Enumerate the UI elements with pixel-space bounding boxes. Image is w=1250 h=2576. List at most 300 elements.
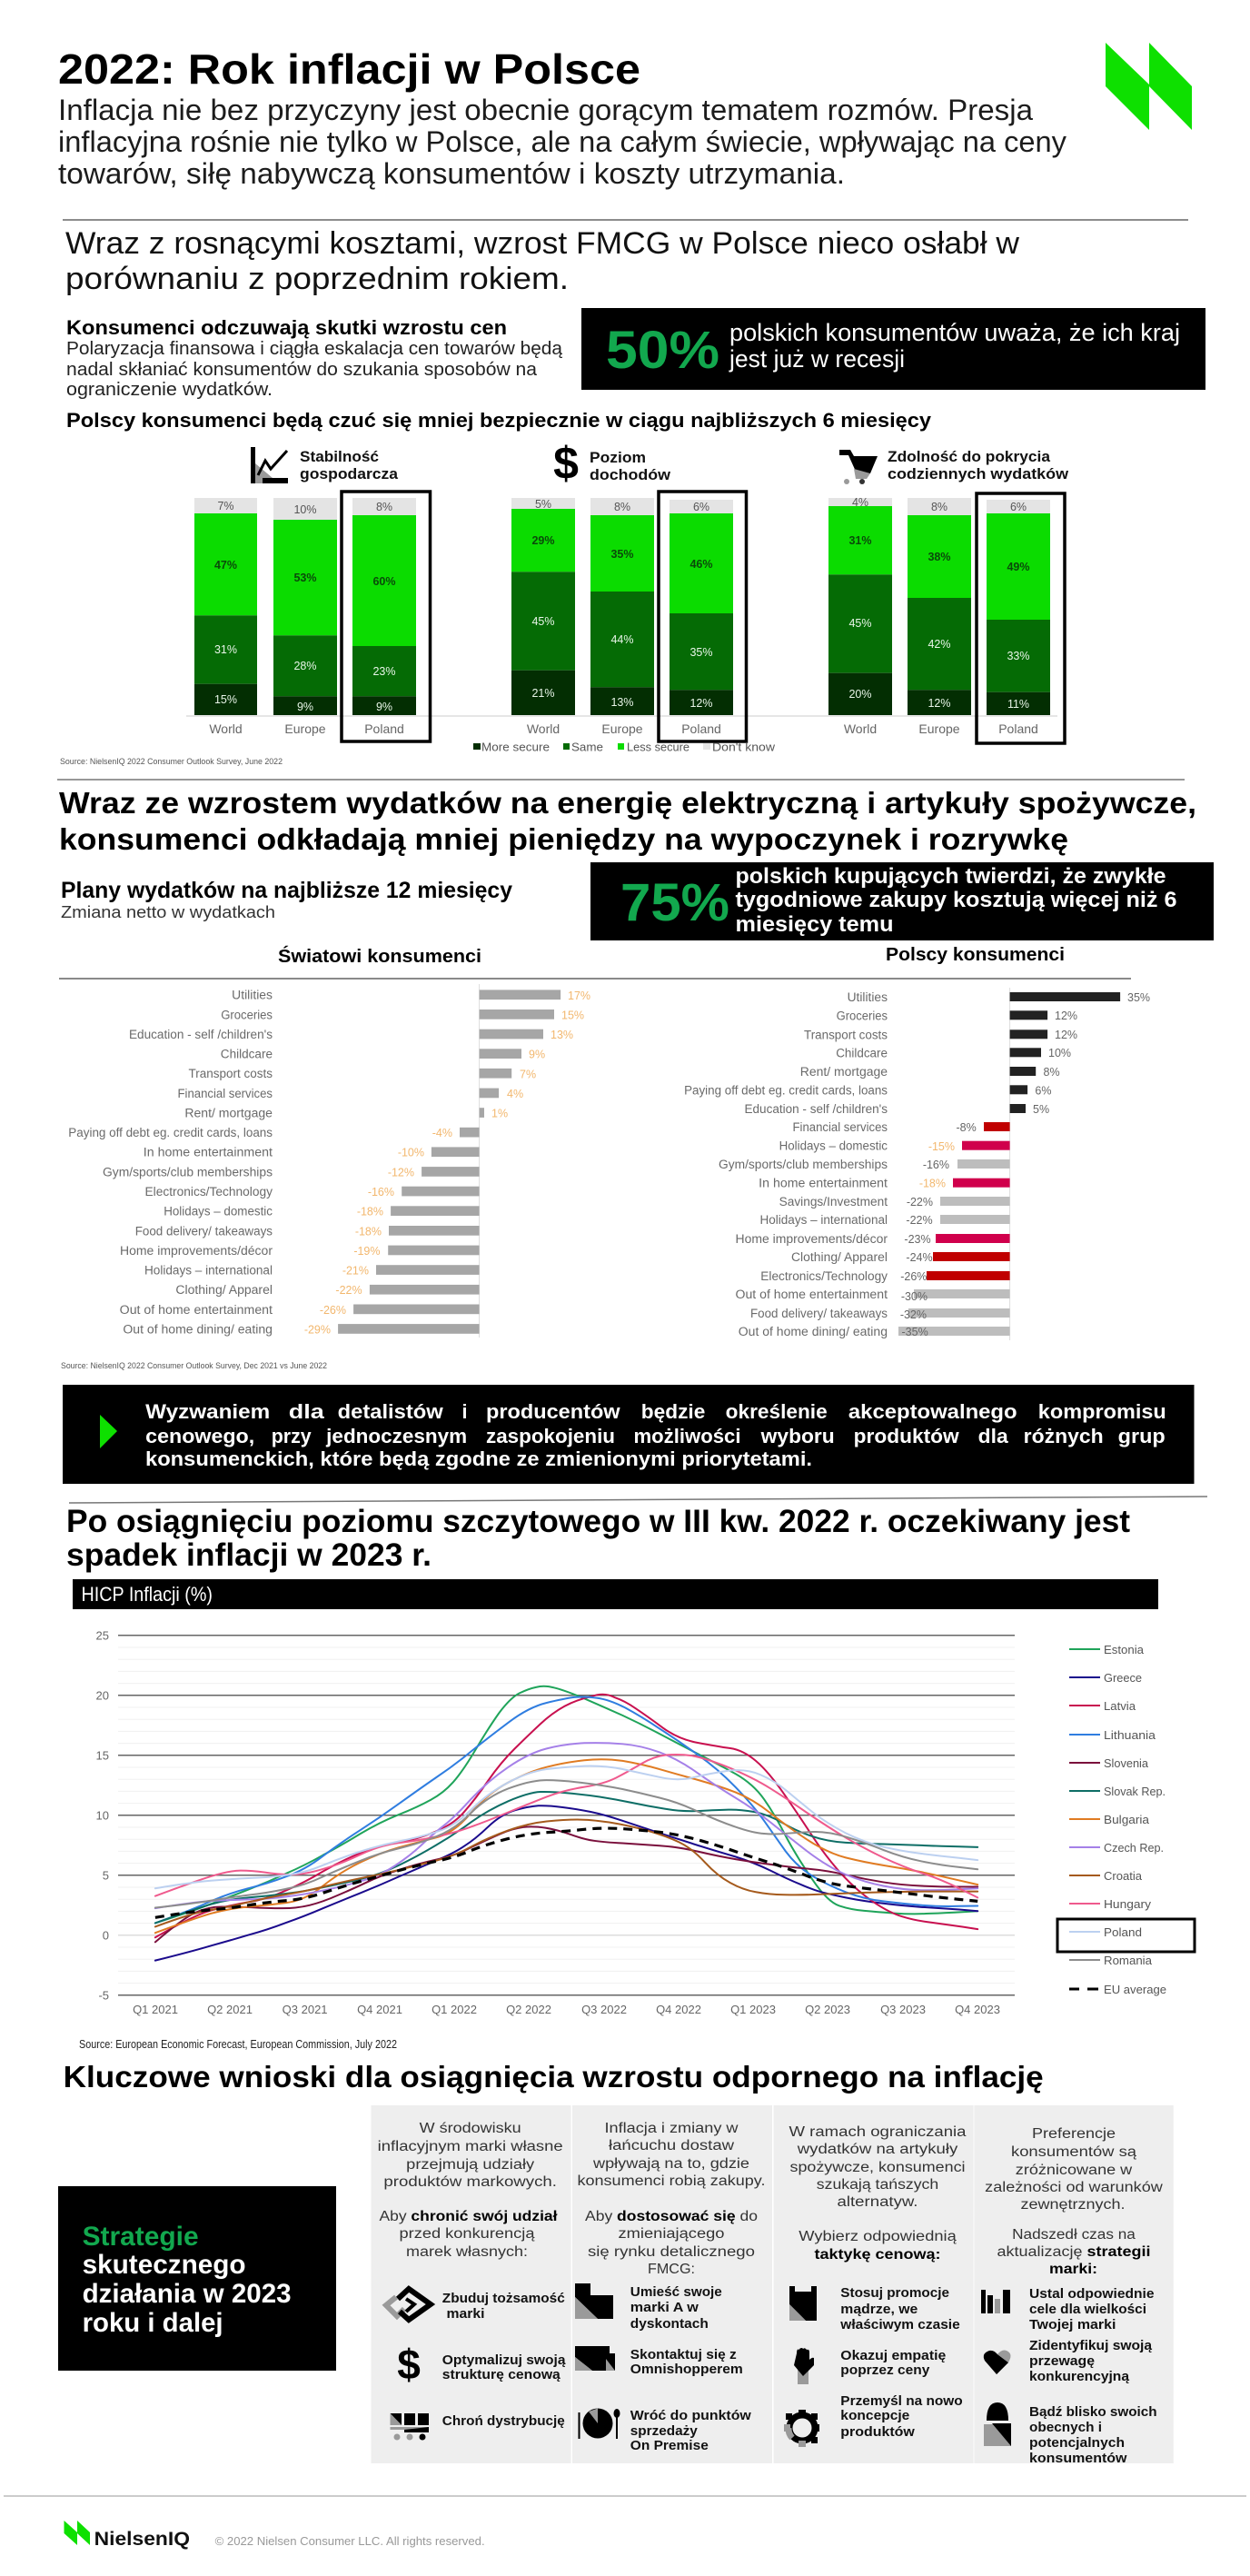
category labels: Out of home dining/ eating <box>739 1325 888 1338</box>
x axis labels: Q3 2023 <box>880 2003 926 2016</box>
callout: challenge for retailers <box>63 1385 1194 1484</box>
callout: challenge for retailers: Wyzwaniem <box>145 1400 270 1423</box>
bar: poland: 23% <box>372 665 396 678</box>
panel: strategies box <box>58 2186 336 2371</box>
poland highlight boxes <box>342 492 1065 743</box>
bar: world <box>828 496 892 715</box>
text: promotions <box>839 2286 960 2332</box>
chart heading: Polscy konsumenci będą czuć się mniej bezpiecznie w ciągu najbliższych 6 miesięcy <box>66 409 932 432</box>
value labels: 10% <box>1048 1047 1071 1059</box>
chart legend: Bulgaria <box>1104 1813 1150 1826</box>
value labels <box>304 990 590 1336</box>
text: build brand identity: Zbuduj tożsamość <box>442 2292 565 2306</box>
bar: poland: 46% <box>689 558 713 571</box>
panel text: alternatyw. <box>838 2194 918 2210</box>
bars <box>338 990 561 1334</box>
label: covering daily expenses: codziennych wydatków <box>888 466 1068 482</box>
chart legend: Estonia <box>1104 1643 1145 1656</box>
line: Hungary <box>155 1755 977 1897</box>
text: stay close to consumers: potencjalnych <box>1029 2436 1125 2451</box>
panel: private label <box>371 2105 570 2463</box>
category labels: Holidays – domestic <box>164 1205 273 1218</box>
text: empathy: Okazuj empatię <box>840 2349 946 2363</box>
bar: world <box>194 498 257 715</box>
panel text: Aby chronić swój udział <box>380 2209 558 2224</box>
text: build brand identity: marki <box>447 2307 485 2322</box>
y axis labels: 25 <box>96 1628 109 1643</box>
category labels: Poland <box>364 721 404 736</box>
chart legend: Latvia <box>1104 1699 1136 1713</box>
bar: europe: 44% <box>610 633 634 646</box>
value labels: -10% <box>398 1147 424 1159</box>
category labels: World <box>209 721 243 736</box>
label: covering daily expenses: Zdolność do pokrycia <box>888 449 1051 465</box>
callout: challenge for retailers: produktów <box>854 1425 960 1447</box>
line: Greece <box>155 1805 977 1961</box>
text: on premise: Wróć do punktów <box>630 2409 752 2423</box>
bar: world: 15% <box>214 693 237 706</box>
callout: challenge for retailers: możliwości <box>634 1425 741 1447</box>
icon: brand identity <box>386 2289 431 2320</box>
chart legend: Hungary <box>1104 1897 1152 1911</box>
bar: europe: 10% <box>293 503 317 516</box>
bar: world <box>511 498 575 715</box>
text: omnishopper <box>630 2348 743 2377</box>
panel text <box>378 2121 563 2260</box>
value labels: -22% <box>906 1214 933 1227</box>
callout: challenge for retailers: określenie <box>726 1400 828 1423</box>
panel text: łańcuchu dostaw <box>609 2138 735 2153</box>
callout: 50%: polskich konsumentów uważa, że ich kraj <box>729 319 1180 346</box>
category labels: Gym/sports/club memberships <box>719 1158 888 1171</box>
panel text: W środowisku <box>420 2121 521 2136</box>
value labels: 12% <box>1055 1010 1077 1022</box>
text: rethink products <box>840 2394 963 2440</box>
icon: dollar: $ <box>397 2341 421 2388</box>
value labels: -8% <box>956 1121 977 1134</box>
chart legend: Slovenia <box>1104 1756 1149 1770</box>
bar: world: 47% <box>214 559 237 572</box>
y axis labels: 0 <box>103 1928 109 1943</box>
panel text: zależności od warunków <box>985 2180 1164 2195</box>
bar: world: 45% <box>531 615 555 628</box>
value labels: -22% <box>335 1284 362 1297</box>
line: Slovak Rep. <box>155 1792 977 1923</box>
legend: Same <box>571 741 603 754</box>
bar: world: 29% <box>531 534 555 547</box>
label: economic stability: gospodarcza <box>300 466 399 482</box>
value labels: 17% <box>568 990 590 1002</box>
text: discount placement: dyskontach <box>630 2317 709 2332</box>
panel text: zróżnicowane w <box>1016 2163 1133 2178</box>
text: discount placement: Umieść swoje <box>630 2285 722 2300</box>
line: Poland <box>155 1766 977 1888</box>
icon: person <box>984 2402 1011 2446</box>
value labels: -12% <box>388 1166 414 1179</box>
category labels: Rent/ mortgage <box>184 1107 273 1119</box>
text: empathy <box>840 2349 946 2378</box>
section heading: spending <box>59 786 1196 856</box>
category labels: Financial services <box>792 1120 888 1134</box>
section heading: inflation forecast <box>66 1504 1130 1573</box>
text: brand size goals: Twojej marki <box>1029 2318 1116 2332</box>
category labels: Food delivery/ takeaways <box>135 1224 273 1238</box>
category labels: Clothing/ Apparel <box>175 1283 273 1297</box>
bar: poland: 35% <box>689 646 713 659</box>
text: stay close to consumers: obecnych i <box>1029 2421 1102 2435</box>
value labels: -19% <box>353 1245 380 1258</box>
x axis labels: Q1 2021 <box>133 2003 178 2016</box>
callout: 50%: 50% <box>606 321 719 380</box>
x axis labels: Q4 2021 <box>357 2003 402 2016</box>
y axis labels: 20 <box>96 1688 109 1703</box>
icon: omnichannel <box>575 2346 615 2371</box>
line: Slovenia <box>155 1826 977 1942</box>
x axis labels: Q3 2022 <box>581 2003 627 2016</box>
icon: shopping bag <box>789 2286 817 2321</box>
value labels: -23% <box>904 1233 931 1246</box>
category labels: Home improvements/décor <box>736 1232 888 1246</box>
bar: world: 4% <box>852 496 868 509</box>
text: competitive advantage: Zidentyfikuj swoją <box>1029 2339 1153 2353</box>
category labels: Paying off debt eg. credit cards, loans <box>684 1083 888 1097</box>
callout: 50% <box>581 308 1205 390</box>
callout: challenge for retailers: cenowego, <box>145 1425 254 1447</box>
chart legend: Czech Rep. <box>1104 1841 1164 1855</box>
intro text: inflacyjna rośnie nie tylko w Polsce, ale na całym świecie, wpływając na ceny <box>58 125 1066 158</box>
line: EU average <box>155 1828 977 1917</box>
category labels: In home entertainment <box>759 1177 888 1190</box>
legend: More secure <box>481 741 550 754</box>
bar: poland: 49% <box>1007 561 1030 573</box>
category labels: In home entertainment <box>144 1146 273 1159</box>
footer logo <box>64 2521 190 2550</box>
panel text <box>985 2126 1164 2277</box>
value labels: -29% <box>304 1323 331 1336</box>
stacked bar chart: economic stability <box>194 498 416 715</box>
y axis labels <box>96 1628 109 2003</box>
callout: challenge for retailers: dla <box>289 1400 325 1423</box>
icon: store <box>575 2283 613 2319</box>
category labels: Paying off debt eg. credit cards, loans <box>68 1126 273 1139</box>
bar: europe <box>273 498 337 715</box>
icon: dining <box>578 2408 620 2439</box>
label: economic stability <box>300 449 399 482</box>
panel: strategies box: Strategie <box>83 2222 199 2252</box>
chart header bar <box>73 1579 1158 1609</box>
x axis labels: Q2 2022 <box>506 2003 551 2016</box>
bar: europe: 42% <box>928 638 951 651</box>
bars <box>898 992 1120 1336</box>
text block: consumers feel price increases: Polaryzacja finansowa i ciągła eskalacja cen towarów będą <box>66 339 563 359</box>
bar: poland <box>987 500 1050 715</box>
icon: dollar: $ <box>553 438 579 489</box>
panel: adapt to retail market <box>572 2105 772 2463</box>
x axis labels: Q1 2022 <box>432 2003 477 2016</box>
callout: challenge for retailers: i <box>461 1400 467 1423</box>
icon: green arrow <box>100 1415 117 1448</box>
legend: Less secure <box>627 741 689 754</box>
callout: challenge for retailers: różnych <box>1024 1425 1104 1447</box>
bar: poland: 8% <box>376 501 392 513</box>
icon: distribution shelf <box>391 2413 429 2441</box>
line: Latvia <box>155 1695 977 1937</box>
text: rethink products: Przemyśl na nowo <box>840 2394 963 2409</box>
x axis labels: Q1 2023 <box>730 2003 776 2016</box>
section heading: FMCG growth: Wraz z rosnącymi kosztami, wzrost FMCG w Polsce nieco osłabł w <box>65 226 1019 261</box>
value labels: -18% <box>355 1225 382 1238</box>
chart header bar: HICP Inflacji (%) <box>82 1583 213 1606</box>
footer logo: NielsenIQ <box>94 2529 190 2550</box>
panel text: taktykę cenową: <box>814 2247 941 2263</box>
chart legend: EU average <box>1104 1983 1166 1996</box>
chart legend: Croatia <box>1104 1869 1143 1883</box>
value labels: -15% <box>928 1140 955 1153</box>
category labels: Out of home entertainment <box>736 1288 888 1301</box>
chart legend <box>1057 1643 1195 1996</box>
text: rethink products: koncepcje <box>840 2409 909 2423</box>
panel text: Nadszedł czas na <box>1012 2227 1136 2243</box>
y axis labels: 10 <box>96 1808 109 1823</box>
bar: europe <box>908 498 971 715</box>
section heading: FMCG growth: porównaniu z poprzednim rokiem. <box>65 262 569 296</box>
panel text: aktualizację strategii <box>997 2244 1150 2260</box>
text: build brand identity <box>442 2292 565 2322</box>
category labels: Clothing/ Apparel <box>791 1250 888 1264</box>
callout: challenge for retailers: dla <box>978 1425 1008 1447</box>
value labels: 4% <box>507 1088 523 1100</box>
callout: 75%: 75% <box>620 873 729 932</box>
category labels: Home improvements/décor <box>120 1244 273 1258</box>
text: on premise <box>630 2409 752 2453</box>
value labels: 5% <box>1033 1103 1049 1116</box>
callout: challenge for retailers: producentów <box>486 1400 621 1423</box>
bar: poland: 33% <box>1007 650 1030 662</box>
value labels: -35% <box>902 1326 928 1338</box>
section heading: spending: Wraz ze wzrostem wydatków na energię elektryczną i artykuły spożywcze, <box>59 786 1196 820</box>
value labels: 7% <box>520 1069 536 1081</box>
panel text: spożywcze, konsumenci <box>790 2160 965 2175</box>
value labels: 6% <box>1035 1085 1051 1098</box>
category labels <box>68 989 273 1336</box>
panel text: Inflacja i zmiany w <box>605 2121 739 2136</box>
value labels: -32% <box>900 1308 927 1321</box>
panel text <box>789 2124 967 2263</box>
callout: challenge for retailers: kompromisu <box>1038 1400 1166 1423</box>
source note: Source: European Economic Forecast, European Commission, July 2022 <box>79 2038 397 2051</box>
callout: 50%: jest już w recesji <box>729 345 905 373</box>
section heading: inflation forecast: Po osiągnięciu poziomu szczytowego w III kw. 2022 r. oczekiwany jest <box>66 1504 1130 1539</box>
bar: poland: 9% <box>376 701 392 713</box>
bar: world: 20% <box>848 688 872 701</box>
x axis labels: Q4 2023 <box>955 2003 1000 2016</box>
stacked bar chart: income level <box>511 498 733 715</box>
category labels: Rent/ mortgage <box>800 1065 888 1079</box>
panel: brand strategy <box>974 2105 1174 2466</box>
panel: price tactics <box>774 2105 974 2463</box>
line: Bulgaria <box>155 1759 977 1933</box>
x axis labels: Q2 2021 <box>207 2003 253 2016</box>
title: 2022: Rok inflacji w Polsce <box>58 45 640 93</box>
panel text: się rynku detalicznego <box>588 2244 755 2260</box>
value labels: -21% <box>342 1265 369 1278</box>
chart legend: Slovak Rep. <box>1104 1785 1166 1798</box>
bar: world: 5% <box>535 498 551 511</box>
bar: europe: 53% <box>293 572 317 584</box>
bar: poland: 11% <box>1007 698 1029 711</box>
panel text: przed konkurencją <box>400 2226 535 2242</box>
panel text: zmieniającego <box>618 2226 725 2242</box>
value labels: -4% <box>432 1127 452 1139</box>
panel text: W ramach ograniczania <box>789 2124 967 2140</box>
category labels <box>684 990 888 1338</box>
category labels: Out of home dining/ eating <box>123 1322 273 1336</box>
text block: consumers feel price increases: nadal skłaniać konsumentów do szukania sposobów na <box>66 360 538 380</box>
intro text: Inflacja nie bez przyczyny jest obecnie gorącym tematem rozmów. Presja <box>58 94 1033 126</box>
line: Croatia <box>155 1819 977 1926</box>
panel text: Aby dostosować się do <box>585 2209 758 2224</box>
y axis labels: -5 <box>98 1988 109 2003</box>
text block: consumers feel price increases: Konsumenci odczuwają skutki wzrostu cen <box>66 316 507 339</box>
bar: europe: 28% <box>293 660 317 672</box>
category labels: Education - self /children's <box>745 1102 888 1116</box>
x axis labels: Q2 2023 <box>805 2003 850 2016</box>
panel text: szukają tańszych <box>817 2177 938 2193</box>
panel: strategies box: skutecznego <box>83 2250 246 2280</box>
text: protect distribution: Chroń dystrybucję <box>442 2414 565 2429</box>
bar: poland <box>670 500 733 715</box>
line chart: HICP inflation <box>96 1628 1015 2016</box>
panel text <box>578 2121 765 2277</box>
value labels: 9% <box>529 1049 545 1061</box>
chart legend: Romania <box>1104 1954 1153 1967</box>
text: stay close to consumers: Bądź blisko swoich <box>1029 2405 1157 2420</box>
chart title: global consumers: Światowi konsumenci <box>278 945 481 967</box>
text: discount placement: marki A w <box>630 2301 699 2315</box>
bar chart: global consumers <box>68 984 590 1338</box>
line: Czech Rep. <box>155 1743 977 1908</box>
text: stay close to consumers <box>1029 2405 1157 2466</box>
intro text <box>58 94 1066 190</box>
subheading: spending plans <box>61 878 512 921</box>
value labels: -16% <box>923 1159 949 1171</box>
icon: shopping cart <box>839 450 878 484</box>
bar: world: 21% <box>531 687 555 700</box>
bar: world: 31% <box>214 643 237 656</box>
panel text: Wybierz odpowiednią <box>799 2229 957 2244</box>
category labels: Out of home entertainment <box>120 1303 273 1317</box>
section heading: spending: konsumenci odkładają mniej pieniędzy na wypoczynek i rozrywkę <box>59 822 1068 856</box>
text: promotions: właściwym czasie <box>839 2318 960 2332</box>
panel text: konsumentów są <box>1011 2144 1136 2160</box>
gridlines <box>118 1647 1015 1984</box>
icon: bars <box>981 2290 1010 2313</box>
value labels: -18% <box>357 1206 383 1218</box>
value labels: 1% <box>491 1107 508 1119</box>
source note: Source: NielsenIQ 2022 Consumer Outlook Survey, Dec 2021 vs June 2022 <box>61 1361 327 1371</box>
text: brand size goals <box>1029 2287 1154 2332</box>
label: economic stability: Stabilność <box>300 449 379 465</box>
category labels: Food delivery/ takeaways <box>750 1307 888 1320</box>
callout: challenge for retailers: grup <box>1118 1425 1166 1447</box>
category labels: Transport costs <box>189 1067 273 1080</box>
value labels: 13% <box>551 1029 573 1041</box>
footer copyright: © 2022 Nielsen Consumer LLC. All rights reserved. <box>215 2535 485 2548</box>
category labels: Poland <box>998 721 1038 736</box>
callout: 75%: polskich kupujących twierdzi, że zwykłe <box>736 864 1166 889</box>
bar: europe: 9% <box>297 701 313 713</box>
value labels: 35% <box>1127 991 1150 1004</box>
icon: NielsenIQ mark <box>1106 43 1192 130</box>
bar: world: 7% <box>217 500 234 512</box>
value labels: 15% <box>561 1009 584 1021</box>
category labels: Childcare <box>836 1046 888 1059</box>
bar: poland <box>352 498 416 715</box>
text: discount placement <box>630 2285 722 2332</box>
category labels: Poland <box>681 721 721 736</box>
category labels: Transport costs <box>804 1028 888 1041</box>
panel text: inflacyjnym marki własne <box>378 2139 563 2154</box>
value labels: -22% <box>907 1196 933 1208</box>
bar: europe: 12% <box>928 697 951 710</box>
panel text: konsumenci robią zakupy. <box>578 2173 765 2189</box>
text: rethink products: produktów <box>840 2425 916 2440</box>
icon: economy chart <box>251 447 288 483</box>
icon: hand <box>794 2348 814 2384</box>
panel text: Preferencje <box>1032 2126 1116 2142</box>
category labels: World <box>844 721 877 736</box>
value labels: -26% <box>900 1270 927 1283</box>
intro text: towarów, siłę nabywczą konsumentów i koszty utrzymania. <box>58 157 845 190</box>
bar: europe: 8% <box>614 501 630 513</box>
legend <box>473 741 776 754</box>
text: competitive advantage: konkurencyjną <box>1029 2370 1130 2384</box>
line: Lithuania <box>155 1697 977 1923</box>
label: income level: Poziom <box>590 450 646 466</box>
text: optimize price structure <box>442 2353 567 2382</box>
text: on premise: On Premise <box>630 2439 709 2453</box>
category labels: Europe <box>918 721 960 736</box>
chart legend: Greece <box>1104 1671 1142 1685</box>
bar: poland: 12% <box>689 697 713 710</box>
section heading: key takeaways: Kluczowe wnioski dla osiągnięcia wzrostu odpornego na inflację <box>64 2060 1044 2094</box>
category labels: Education - self /children's <box>129 1028 273 1041</box>
category labels: Europe <box>284 721 326 736</box>
panel text: produktów markowych. <box>383 2174 557 2190</box>
callout: challenge for retailers: przy <box>272 1425 312 1447</box>
text: promotions: mądrze, we <box>840 2302 918 2317</box>
label: income level: dochodów <box>590 467 670 483</box>
bar: poland: 60% <box>372 575 396 588</box>
text: competitive advantage <box>1029 2339 1153 2384</box>
category labels: Groceries <box>221 1008 273 1021</box>
value labels: -18% <box>919 1178 946 1190</box>
line: Romania <box>155 1780 977 1907</box>
text: competitive advantage: przewagę <box>1029 2354 1095 2369</box>
category labels: Electronics/Technology <box>760 1269 888 1283</box>
category labels: Holidays – international <box>144 1263 273 1278</box>
callout: 75%: miesięcy temu <box>736 912 894 937</box>
text: promotions: Stosuj promocje <box>840 2286 949 2301</box>
category labels: Europe <box>601 721 643 736</box>
callout: challenge for retailers: detalistów <box>338 1400 444 1423</box>
section heading: inflation forecast: spadek inflacji w 2023 r. <box>66 1537 432 1573</box>
category labels: Gym/sports/club memberships <box>103 1165 273 1179</box>
panel text: marek własnych: <box>406 2244 528 2260</box>
bar: world: 45% <box>848 617 872 630</box>
category labels: Savings/Investment <box>779 1195 888 1208</box>
label: income level <box>590 450 670 483</box>
